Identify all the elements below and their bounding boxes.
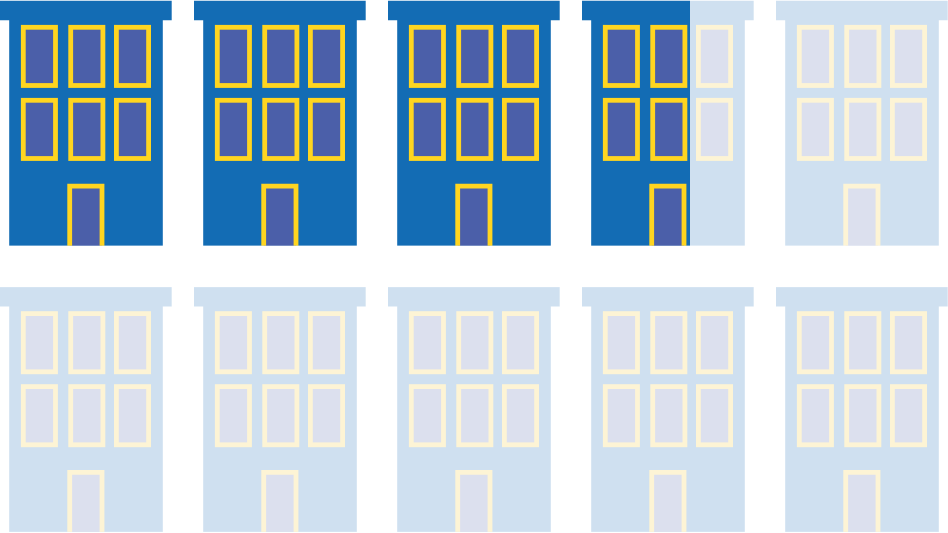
building 1: filled — [0, 1, 172, 246]
building 6: empty — [0, 287, 172, 532]
building 9: empty — [582, 287, 754, 532]
building 10: empty — [776, 287, 948, 532]
building 2: filled — [194, 1, 366, 246]
building 8: empty — [388, 287, 560, 532]
building 3: filled — [388, 1, 560, 246]
building 7: empty — [194, 287, 366, 532]
building 5: empty — [776, 1, 948, 246]
building 4: partly filled — [582, 1, 754, 246]
